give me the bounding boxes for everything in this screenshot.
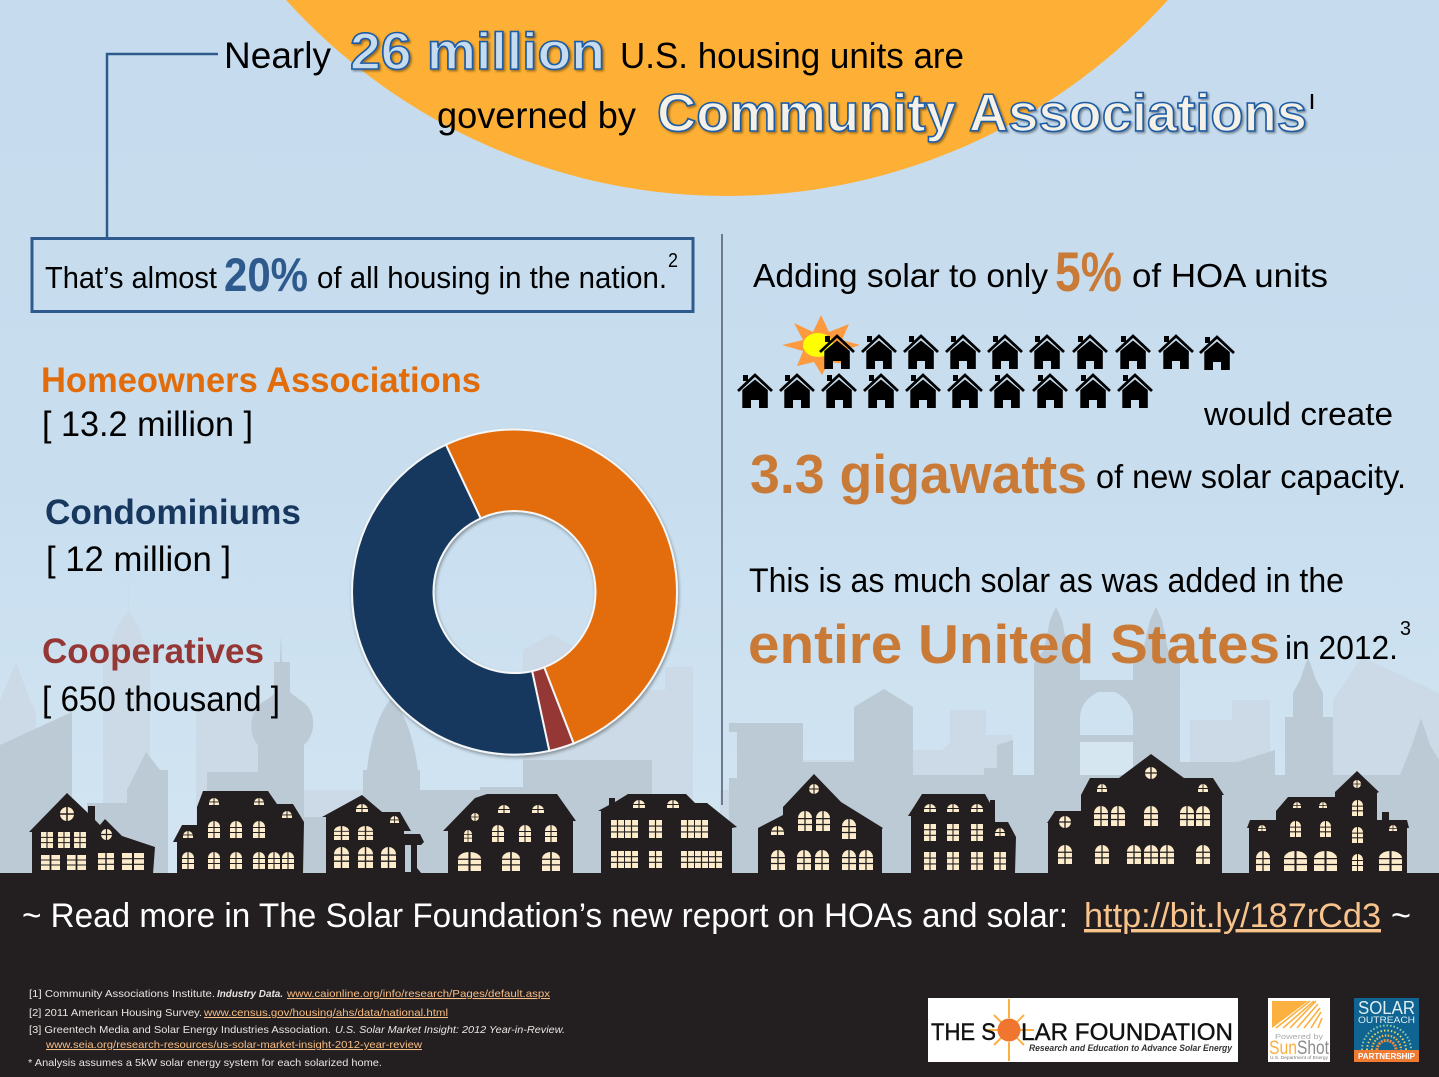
legend: condominiums: [ 12 million ] xyxy=(46,540,231,579)
house 1 xyxy=(29,793,155,874)
legend: cooperatives xyxy=(42,632,280,719)
title: l xyxy=(1309,92,1315,114)
title xyxy=(224,23,1315,143)
footer band xyxy=(0,873,1439,1077)
donut chart xyxy=(352,430,677,755)
logo: the solar foundation: Research and Education to Advance Solar Energy xyxy=(1029,1043,1233,1053)
legend: cooperatives: Cooperatives xyxy=(42,632,264,671)
footnotes: U.S. Solar Market Insight: 2012 Year-in-Review. xyxy=(335,1024,565,1036)
logo: sunshot: U.S. Department of Energy xyxy=(1270,1055,1329,1060)
legend: condominiums xyxy=(45,493,301,579)
text: gigawatts: 3.3 gigawatts xyxy=(750,443,1087,505)
logo: sunshot xyxy=(1268,998,1330,1062)
house 2 xyxy=(173,791,304,874)
logo: the solar foundation: LAR FOUNDATION xyxy=(1021,1019,1233,1046)
footnotes: [1] Community Associations Institute. xyxy=(29,988,215,1000)
footer call to action: ~ xyxy=(1391,897,1411,935)
text: adding solar: Adding solar to only xyxy=(753,257,1048,294)
house 5 xyxy=(598,794,737,874)
segment: condominiums xyxy=(352,445,549,755)
footnotes: [2] 2011 American Housing Survey. xyxy=(29,1007,202,1019)
legend: condominiums: Condominiums xyxy=(45,493,301,532)
footnotes xyxy=(28,988,565,1069)
text: adding solar: 5% xyxy=(1055,240,1122,303)
text: adding solar xyxy=(753,240,1328,303)
legend: cooperatives: [ 650 thousand ] xyxy=(42,680,280,719)
text: adding solar: of HOA units xyxy=(1132,257,1328,294)
footnotes: www.census.gov/housing/ahs/data/national.html xyxy=(203,1007,448,1019)
logo: solar outreach partnership: PARTNERSHIP xyxy=(1358,1052,1416,1061)
legend: homeowners associations xyxy=(41,361,481,444)
legend: homeowners associations: Homeowners Associations xyxy=(41,361,481,400)
sun semicircle xyxy=(133,0,1321,196)
text: as much solar: This is as much solar as was added in the xyxy=(749,562,1344,600)
logo: the solar foundation: THE S xyxy=(931,1019,996,1046)
text: entire united states: 3 xyxy=(1400,618,1411,640)
callout: 20 percent of housing: of all housing in the nation. xyxy=(317,260,667,295)
house 4 xyxy=(443,794,576,874)
title: Nearly xyxy=(224,35,331,76)
text: entire united states: in 2012. xyxy=(1285,629,1398,666)
footnotes: www.caionline.org/info/research/Pages/default.aspx xyxy=(286,988,551,1000)
house 6 xyxy=(758,774,883,874)
background city skyline xyxy=(0,577,1439,874)
title: governed by xyxy=(437,95,636,136)
logo: the solar foundation xyxy=(928,998,1238,1062)
footer call to action: ~ Read more in The Solar Foundation’s new report on HOAs and solar: xyxy=(22,897,1068,935)
logo: sunshot: Shot xyxy=(1297,1038,1330,1059)
footnotes: * Analysis assumes a 5kW solar energy system for each solarized home. xyxy=(28,1057,382,1069)
icon row: houses xyxy=(738,336,1234,408)
logo: sunshot: Powered by xyxy=(1275,1032,1323,1041)
footnotes: www.seia.org/research-resources/us-solar-market-insight-2012-year-review xyxy=(45,1039,422,1051)
connector line xyxy=(107,54,218,238)
legend: homeowners associations: [ 13.2 million ] xyxy=(42,405,253,444)
icon: sun xyxy=(782,315,860,375)
segment: cooperatives xyxy=(532,667,574,751)
segment: homeowners associations xyxy=(446,430,677,743)
text: gigawatts xyxy=(750,443,1406,505)
text: would create: would create xyxy=(1203,396,1393,432)
title: Community Associations xyxy=(657,84,1307,143)
callout: 20 percent of housing: 20% xyxy=(224,248,308,301)
title: U.S. housing units are xyxy=(620,35,964,76)
footer call to action: http://bit.ly/187rCd3 xyxy=(1084,897,1381,935)
callout: 20 percent of housing: That’s almost xyxy=(45,260,217,295)
logo: solar outreach partnership: OUTREACH xyxy=(1358,1015,1415,1026)
logo: solar outreach partnership: SOLAR xyxy=(1358,998,1415,1018)
text: entire united states: entire United States xyxy=(748,613,1280,675)
divider xyxy=(721,234,723,805)
logo: solar outreach partnership xyxy=(1354,998,1419,1062)
callout: 20 percent of housing xyxy=(32,238,693,312)
callout: 20 percent of housing: 2 xyxy=(668,250,678,272)
house 8 xyxy=(1047,754,1224,873)
house 9 xyxy=(1247,771,1409,873)
footnotes: Industry Data. xyxy=(217,988,283,1000)
text: gigawatts: of new solar capacity. xyxy=(1096,458,1406,495)
house 3 xyxy=(322,795,424,874)
title: 26 million xyxy=(350,23,605,81)
logo: sunshot: Sun xyxy=(1269,1038,1297,1059)
footnotes: [3] Greentech Media and Solar Energy Industries Association. xyxy=(29,1024,331,1036)
house 7 xyxy=(908,794,1016,873)
